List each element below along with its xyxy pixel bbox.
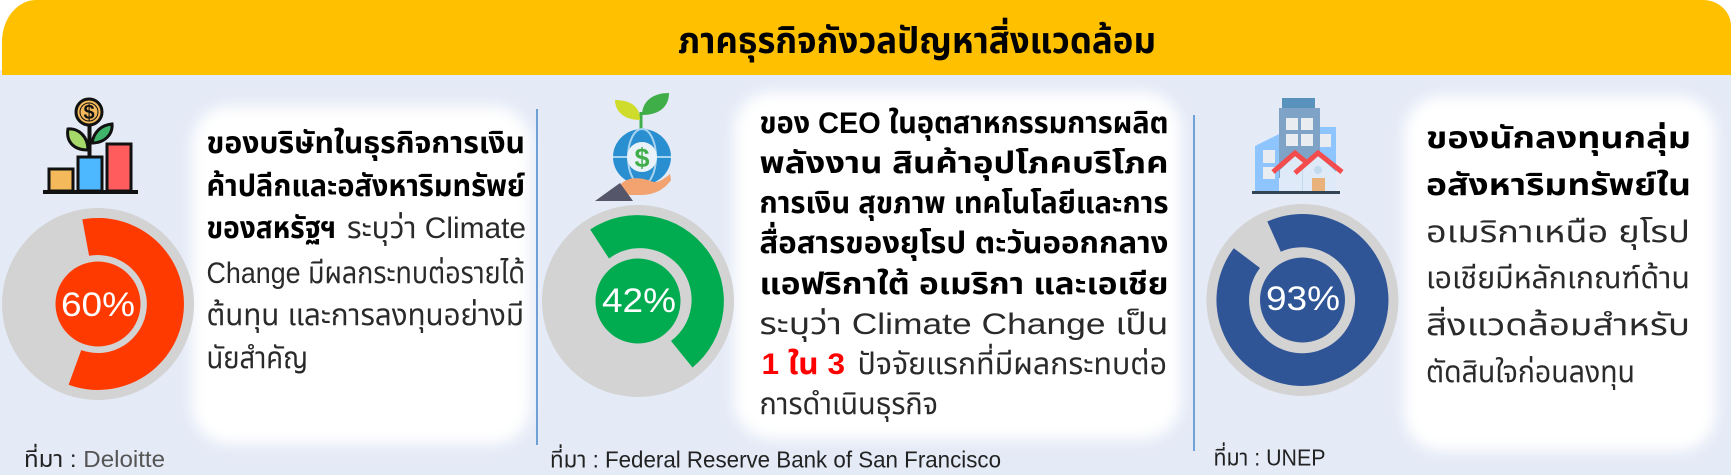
text block 2: สื่อสารของยุโรป ตะวันออกกลาง — [760, 221, 1168, 261]
icon: city buildings and house — [1252, 98, 1342, 194]
text block 1 — [206, 127, 526, 375]
title banner — [2, 0, 1731, 75]
icon: plant growing from bar chart with coin — [43, 99, 138, 194]
panel: text card background 2 — [734, 92, 1181, 439]
text block 3: เอเชียมีหลักเกณฑ์ด้าน — [1426, 262, 1690, 295]
text block 2: การเงิน สุขภาพ เทคโนโลยีและการ — [760, 187, 1168, 221]
icon: hand holding globe with seedling — [595, 93, 671, 201]
source 2: ที่มา : Federal Reserve Bank of San Francisco — [550, 444, 1001, 472]
source 1: ที่มา : Deloitte — [24, 443, 165, 472]
source 3: ที่มา : UNEP — [1214, 442, 1326, 470]
text block 1: ของสหรัฐฯ — [206, 212, 336, 245]
text block 2: การดำเนินธุรกิจ — [760, 388, 938, 422]
panel: text card background 1 — [192, 106, 531, 444]
icon: hand holding globe with seedling: $ — [634, 143, 650, 173]
text block 2: ระบุว่า Climate Change เป็น — [760, 308, 1168, 342]
text block 1: นัยสำคัญ — [206, 342, 308, 375]
text block 2: พลังงาน สินค้าอุปโภคบริโภค — [760, 147, 1168, 181]
icon: plant growing from bar chart with coin: $ — [83, 102, 95, 124]
panel: text card background 3 — [1404, 96, 1716, 451]
text block 3: อสังหาริมทรัพย์ใน — [1426, 169, 1691, 202]
text block 2 — [760, 107, 1168, 422]
text block 1: Change มีผลกระทบต่อรายได้ — [206, 257, 525, 290]
chart: donut 42%: 42% — [602, 282, 676, 320]
text block 2: 1 ใน 3 — [762, 348, 845, 381]
chart: donut 93% — [1206, 204, 1398, 396]
text block 2: แอฟริกาใต้ อเมริกา และเอเชีย — [760, 268, 1168, 301]
text block 3: อเมริกาเหนือ ยุโรป — [1426, 216, 1690, 250]
text block 2: ปัจจัยแรกที่มีผลกระทบต่อ — [858, 343, 1167, 381]
text block 1: ของบริษัทในธุรกิจการเงิน — [206, 127, 525, 161]
text block 1: ค้าปลีกและอสังหาริมทรัพย์ — [206, 170, 525, 203]
chart: donut 60%: 60% — [61, 286, 135, 324]
text block 3: ของนักลงทุนกลุ่ม — [1426, 122, 1691, 156]
chart: donut 93%: 93% — [1266, 280, 1340, 318]
text block 2: ของ CEO ในอุตสาหกรรมการผลิต — [760, 107, 1168, 141]
text block 1: ระบุว่า Climate — [347, 212, 526, 246]
text block 3 — [1426, 122, 1691, 390]
chart: donut 42% — [542, 205, 734, 397]
text block 3: ตัดสินใจก่อนลงทุน — [1426, 356, 1635, 390]
text block 3: สิ่งแวดล้อมสำหรับ — [1426, 306, 1690, 342]
chart: donut 60% — [2, 208, 194, 400]
text block 1: ต้นทุน และการลงทุนอย่างมี — [206, 299, 524, 333]
title: ภาคธุรกิจกังวลปัญหาสิ่งแวดล้อม — [678, 17, 1156, 62]
